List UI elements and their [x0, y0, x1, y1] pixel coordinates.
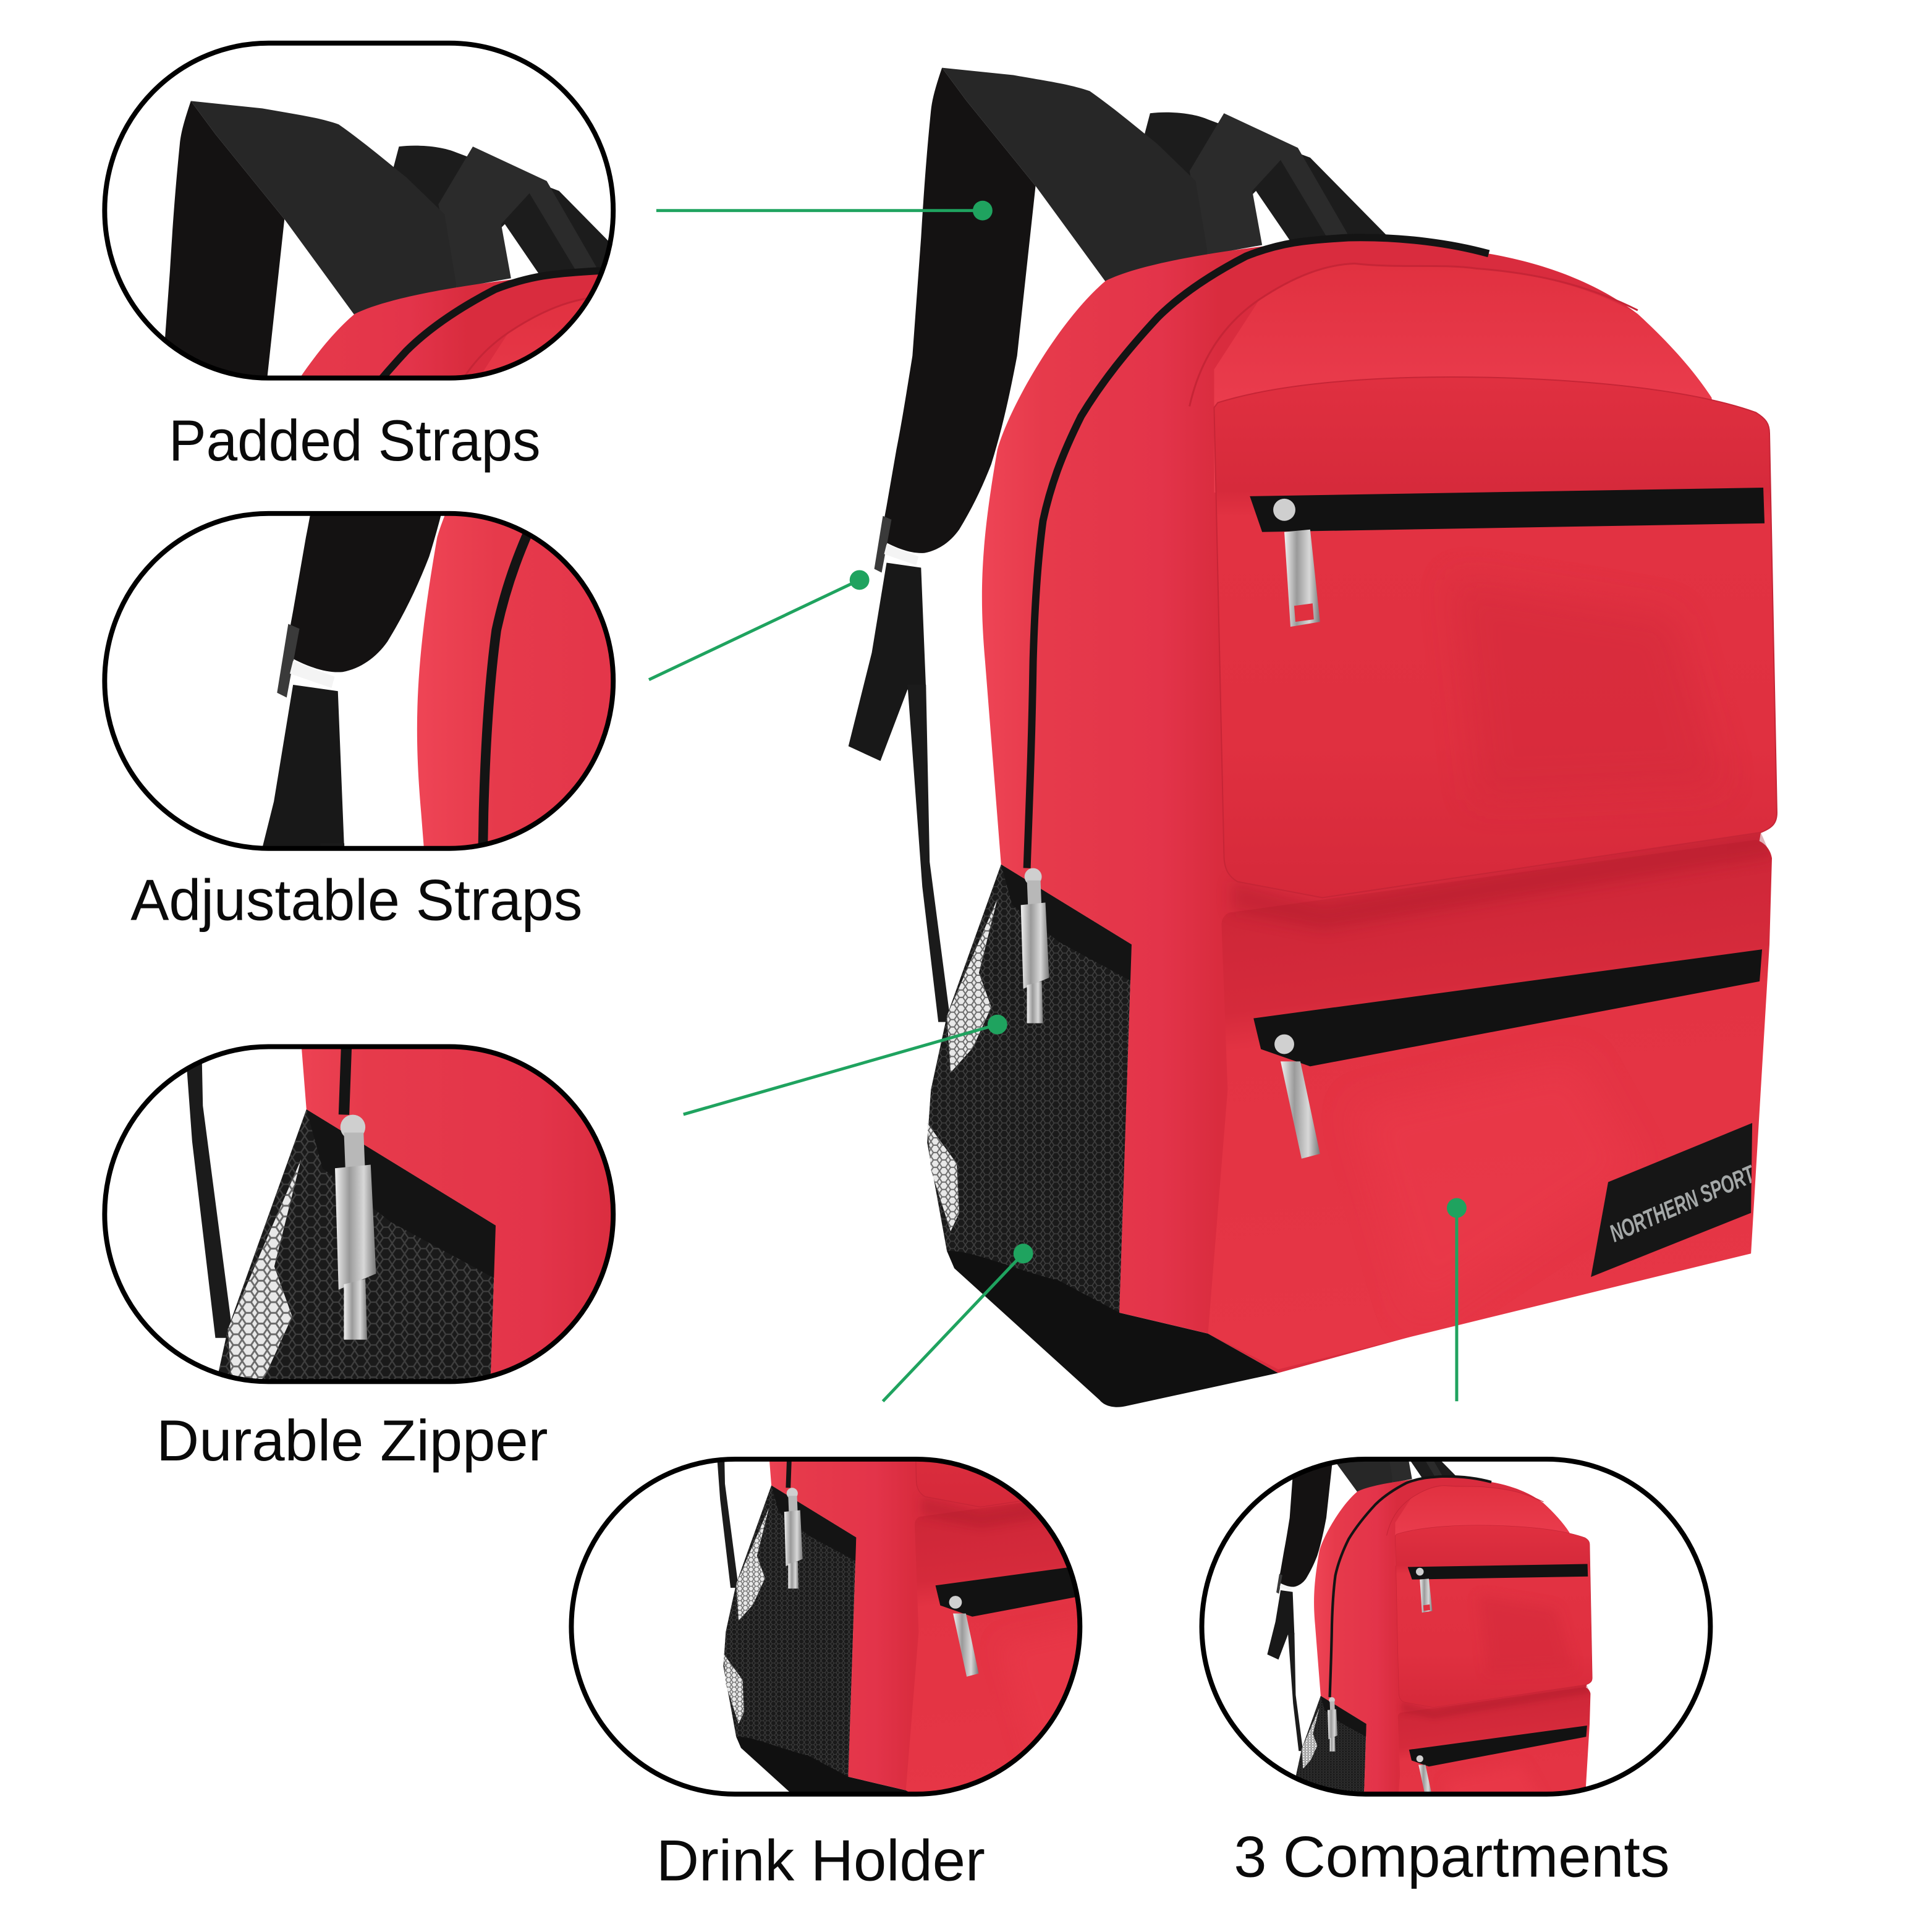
label: 3 compartments: 3 Compartments — [1234, 1824, 1670, 1889]
label: durable zipper: Durable Zipper — [156, 1408, 548, 1473]
inset: padded straps — [102, 41, 616, 381]
shadow under upper pocket — [1231, 823, 1779, 1318]
upper pocket — [1214, 377, 1777, 897]
adjustable lower strap — [849, 563, 926, 761]
main zipper — [1027, 237, 1489, 868]
logo text: NORTHERN SPORT — [1606, 1160, 1760, 1248]
lower zipper pull — [1274, 1035, 1320, 1159]
lower pocket zipper — [1253, 949, 1762, 1066]
lower pocket — [1208, 840, 1772, 1369]
thin strap to base — [907, 685, 951, 1022]
main backpack photo — [849, 68, 1779, 1407]
callout: compartments pointer — [1447, 1198, 1467, 1401]
upper zipper pull — [1273, 499, 1320, 627]
callout: drink holder pointer — [883, 1244, 1033, 1401]
inset: adjustable straps — [102, 511, 616, 851]
backpack body — [982, 237, 1761, 1373]
padded strap underside — [881, 68, 1036, 553]
strap buckle — [875, 516, 891, 572]
upper pocket zipper — [1250, 488, 1765, 532]
main zipper pulls — [1021, 868, 1049, 1023]
far shoulder strap — [1144, 112, 1386, 246]
grab handle webbing — [1190, 113, 1349, 255]
logo patch — [1591, 1123, 1760, 1277]
inset: drink holder — [569, 1457, 1083, 1797]
side mesh pocket — [927, 865, 1132, 1324]
padded strap top face — [942, 68, 1208, 282]
inset: 3 compartments — [1199, 1457, 1713, 1797]
callout: adjustable straps pointer — [649, 570, 870, 680]
top dome panel — [1214, 263, 1724, 493]
callout: padded straps pointer — [656, 201, 993, 221]
inset: durable zipper — [102, 1044, 616, 1384]
callout: durable zipper pointer — [684, 1015, 1007, 1114]
dome stitching — [1190, 263, 1638, 406]
label: padded straps: Padded Straps — [169, 408, 541, 473]
pocket shading — [1453, 578, 1724, 800]
label: adjustable straps: Adjustable Straps — [130, 867, 582, 932]
label: drink holder: Drink Holder — [656, 1828, 985, 1892]
black base — [947, 1251, 1278, 1407]
